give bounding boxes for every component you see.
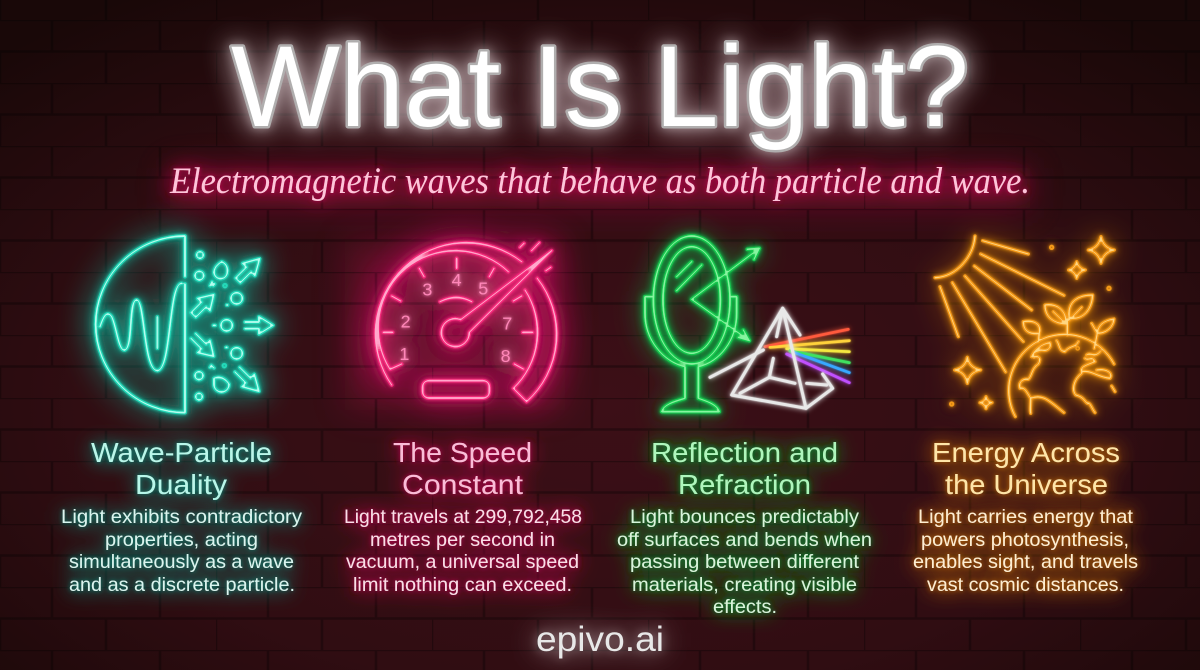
title: What Is Light? — [231, 23, 969, 151]
text: speed description: limit nothing can exceed. — [353, 574, 572, 596]
heading: energy across the universe: the Universe — [945, 469, 1108, 500]
icon: speedometer: 3 — [422, 279, 432, 299]
text: speed description — [344, 506, 582, 596]
icon: speedometer — [376, 243, 557, 402]
text: wave-particle description: simultaneously as a wave — [69, 551, 294, 573]
heading: energy across the universe — [932, 437, 1120, 500]
heading: reflection and refraction: Reflection and — [651, 437, 838, 468]
text: wave-particle description — [61, 506, 302, 596]
icon: speedometer: 2 — [401, 312, 411, 332]
text: reflection description: effects. — [713, 596, 777, 618]
panel: the speed constant — [344, 243, 582, 596]
text: reflection description — [617, 506, 872, 618]
footer brand: epivo.ai — [536, 620, 664, 659]
text: wave-particle description: and as a discrete particle. — [69, 574, 295, 596]
text: speed description: metres per second in — [370, 529, 555, 551]
icon: speedometer: 8 — [501, 346, 511, 366]
text: energy description: vast cosmic distances. — [927, 574, 1124, 596]
icon: speedometer: 7 — [502, 314, 512, 334]
text: energy description — [913, 506, 1138, 596]
text: reflection description: materials, creating visible — [632, 574, 857, 596]
panel: wave-particle duality — [61, 236, 302, 596]
icon: speedometer: 1 — [399, 344, 409, 364]
heading: energy across the universe: Energy Across — [932, 437, 1120, 468]
subtitle: Electromagnetic waves that behave as both particle and wave. — [169, 161, 1030, 202]
heading: the speed constant — [393, 437, 532, 500]
heading: wave-particle duality: Duality — [135, 469, 227, 500]
panel: energy across the universe — [913, 236, 1138, 596]
icon: speedometer: 4 — [452, 270, 462, 290]
text: energy description: Light carries energy that — [918, 506, 1134, 528]
heading: wave-particle duality — [91, 437, 272, 500]
icon: sun, stars, plants and earth — [935, 236, 1115, 417]
heading: the speed constant: The Speed — [393, 437, 532, 468]
text: wave-particle description: Light exhibits contradictory — [61, 506, 302, 528]
icon: half circle wave and particles — [96, 236, 273, 413]
text: reflection description: Light bounces predictably — [630, 506, 859, 528]
text: reflection description: passing between different — [630, 551, 860, 573]
heading: wave-particle duality: Wave-Particle — [91, 437, 272, 468]
text: energy description: powers photosynthesis, — [921, 529, 1129, 551]
heading: the speed constant: Constant — [402, 469, 523, 500]
text: wave-particle description: properties, acting — [105, 529, 258, 551]
text: reflection description: off surfaces and bends when — [617, 529, 872, 551]
heading: reflection and refraction: Refraction — [678, 469, 811, 500]
icon: mirror with reflected arrow — [645, 236, 759, 412]
icon: prism with rainbow — [710, 308, 849, 408]
panel: reflection and refraction — [617, 236, 872, 618]
text: energy description: enables sight, and travels — [913, 551, 1138, 573]
prism outline — [710, 308, 833, 408]
icon: speedometer: 5 — [478, 278, 488, 298]
heading: reflection and refraction — [651, 437, 838, 500]
text: speed description: vacuum, a universal speed — [346, 551, 579, 573]
rainbow beams — [765, 329, 849, 383]
text: speed description: Light travels at 299,792,458 — [344, 506, 582, 528]
